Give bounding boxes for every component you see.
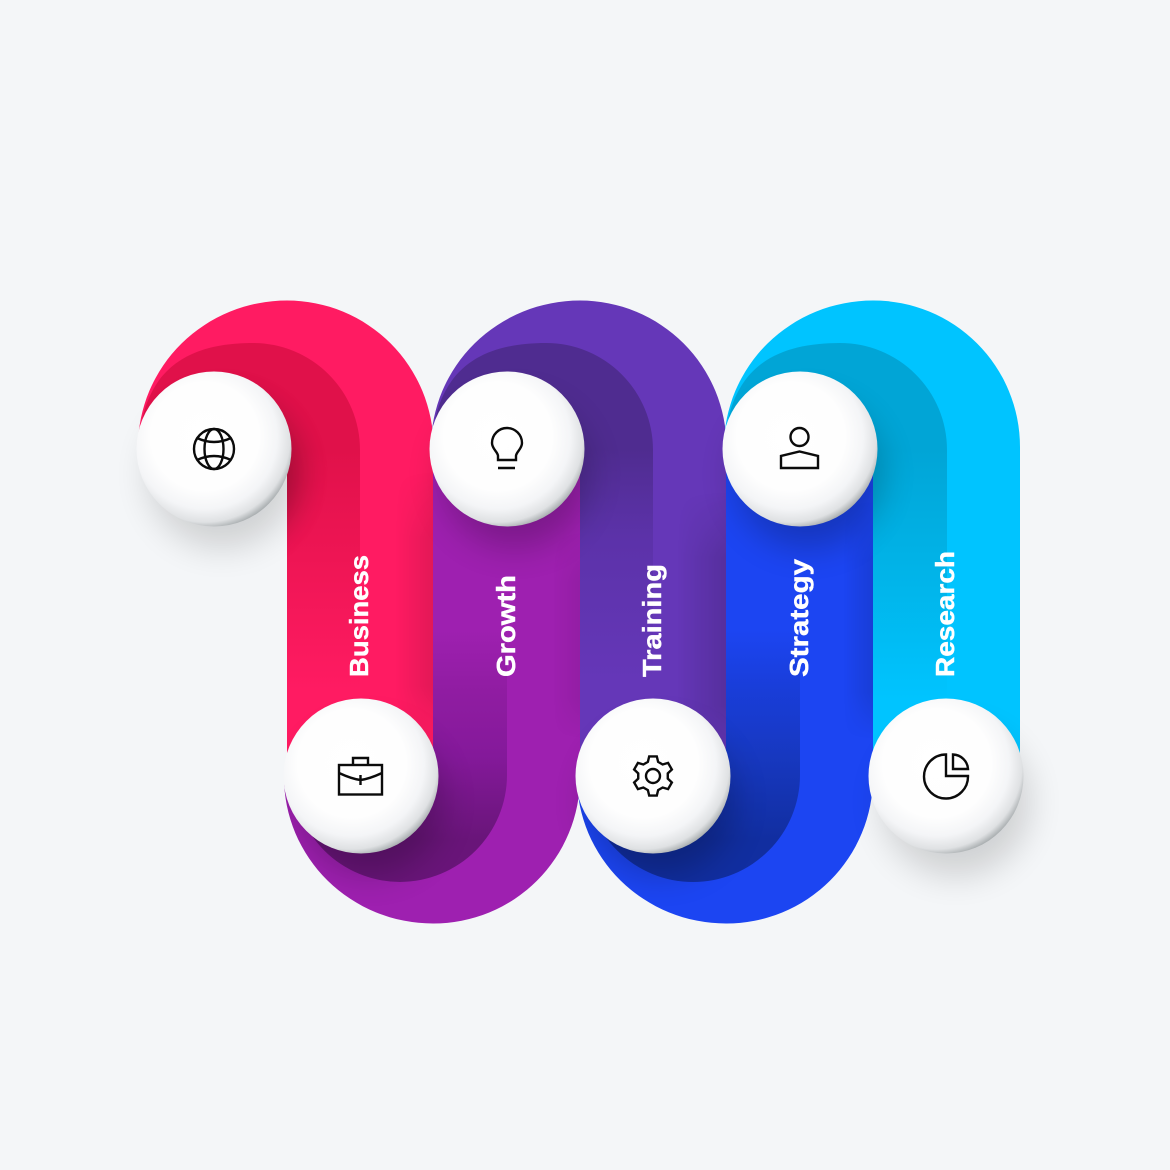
icon: pie chart	[924, 754, 968, 798]
label: Research: Research	[930, 551, 960, 677]
sphere with gear icon	[576, 698, 730, 854]
ribbon: Growth magenta U-bend	[284, 447, 580, 924]
ribbon: Strategy blue U-bend	[577, 447, 873, 924]
sphere with globe icon	[136, 372, 292, 526]
ribbon: Business red arch	[138, 300, 434, 776]
sphere shadows on background	[148, 400, 1030, 876]
icon: briefcase	[339, 758, 382, 794]
sphere with briefcase icon	[284, 698, 438, 854]
sphere with pie chart icon	[868, 698, 1024, 854]
label: Business: Business	[344, 555, 374, 677]
icon: light bulb	[492, 428, 522, 468]
sphere shadows on ribbons	[280, 409, 896, 890]
sphere with light bulb icon	[430, 372, 584, 526]
label: Training: Training	[637, 564, 667, 677]
icon: person	[781, 428, 818, 468]
sphere with person icon	[722, 372, 878, 526]
icon: globe	[194, 429, 234, 469]
ribbon: Research cyan arch	[724, 300, 1020, 776]
label: Strategy: Strategy	[784, 558, 814, 677]
icon: gear	[634, 756, 672, 796]
label: Growth: Growth	[491, 575, 521, 677]
ribbon: Training violet arch	[431, 300, 726, 776]
